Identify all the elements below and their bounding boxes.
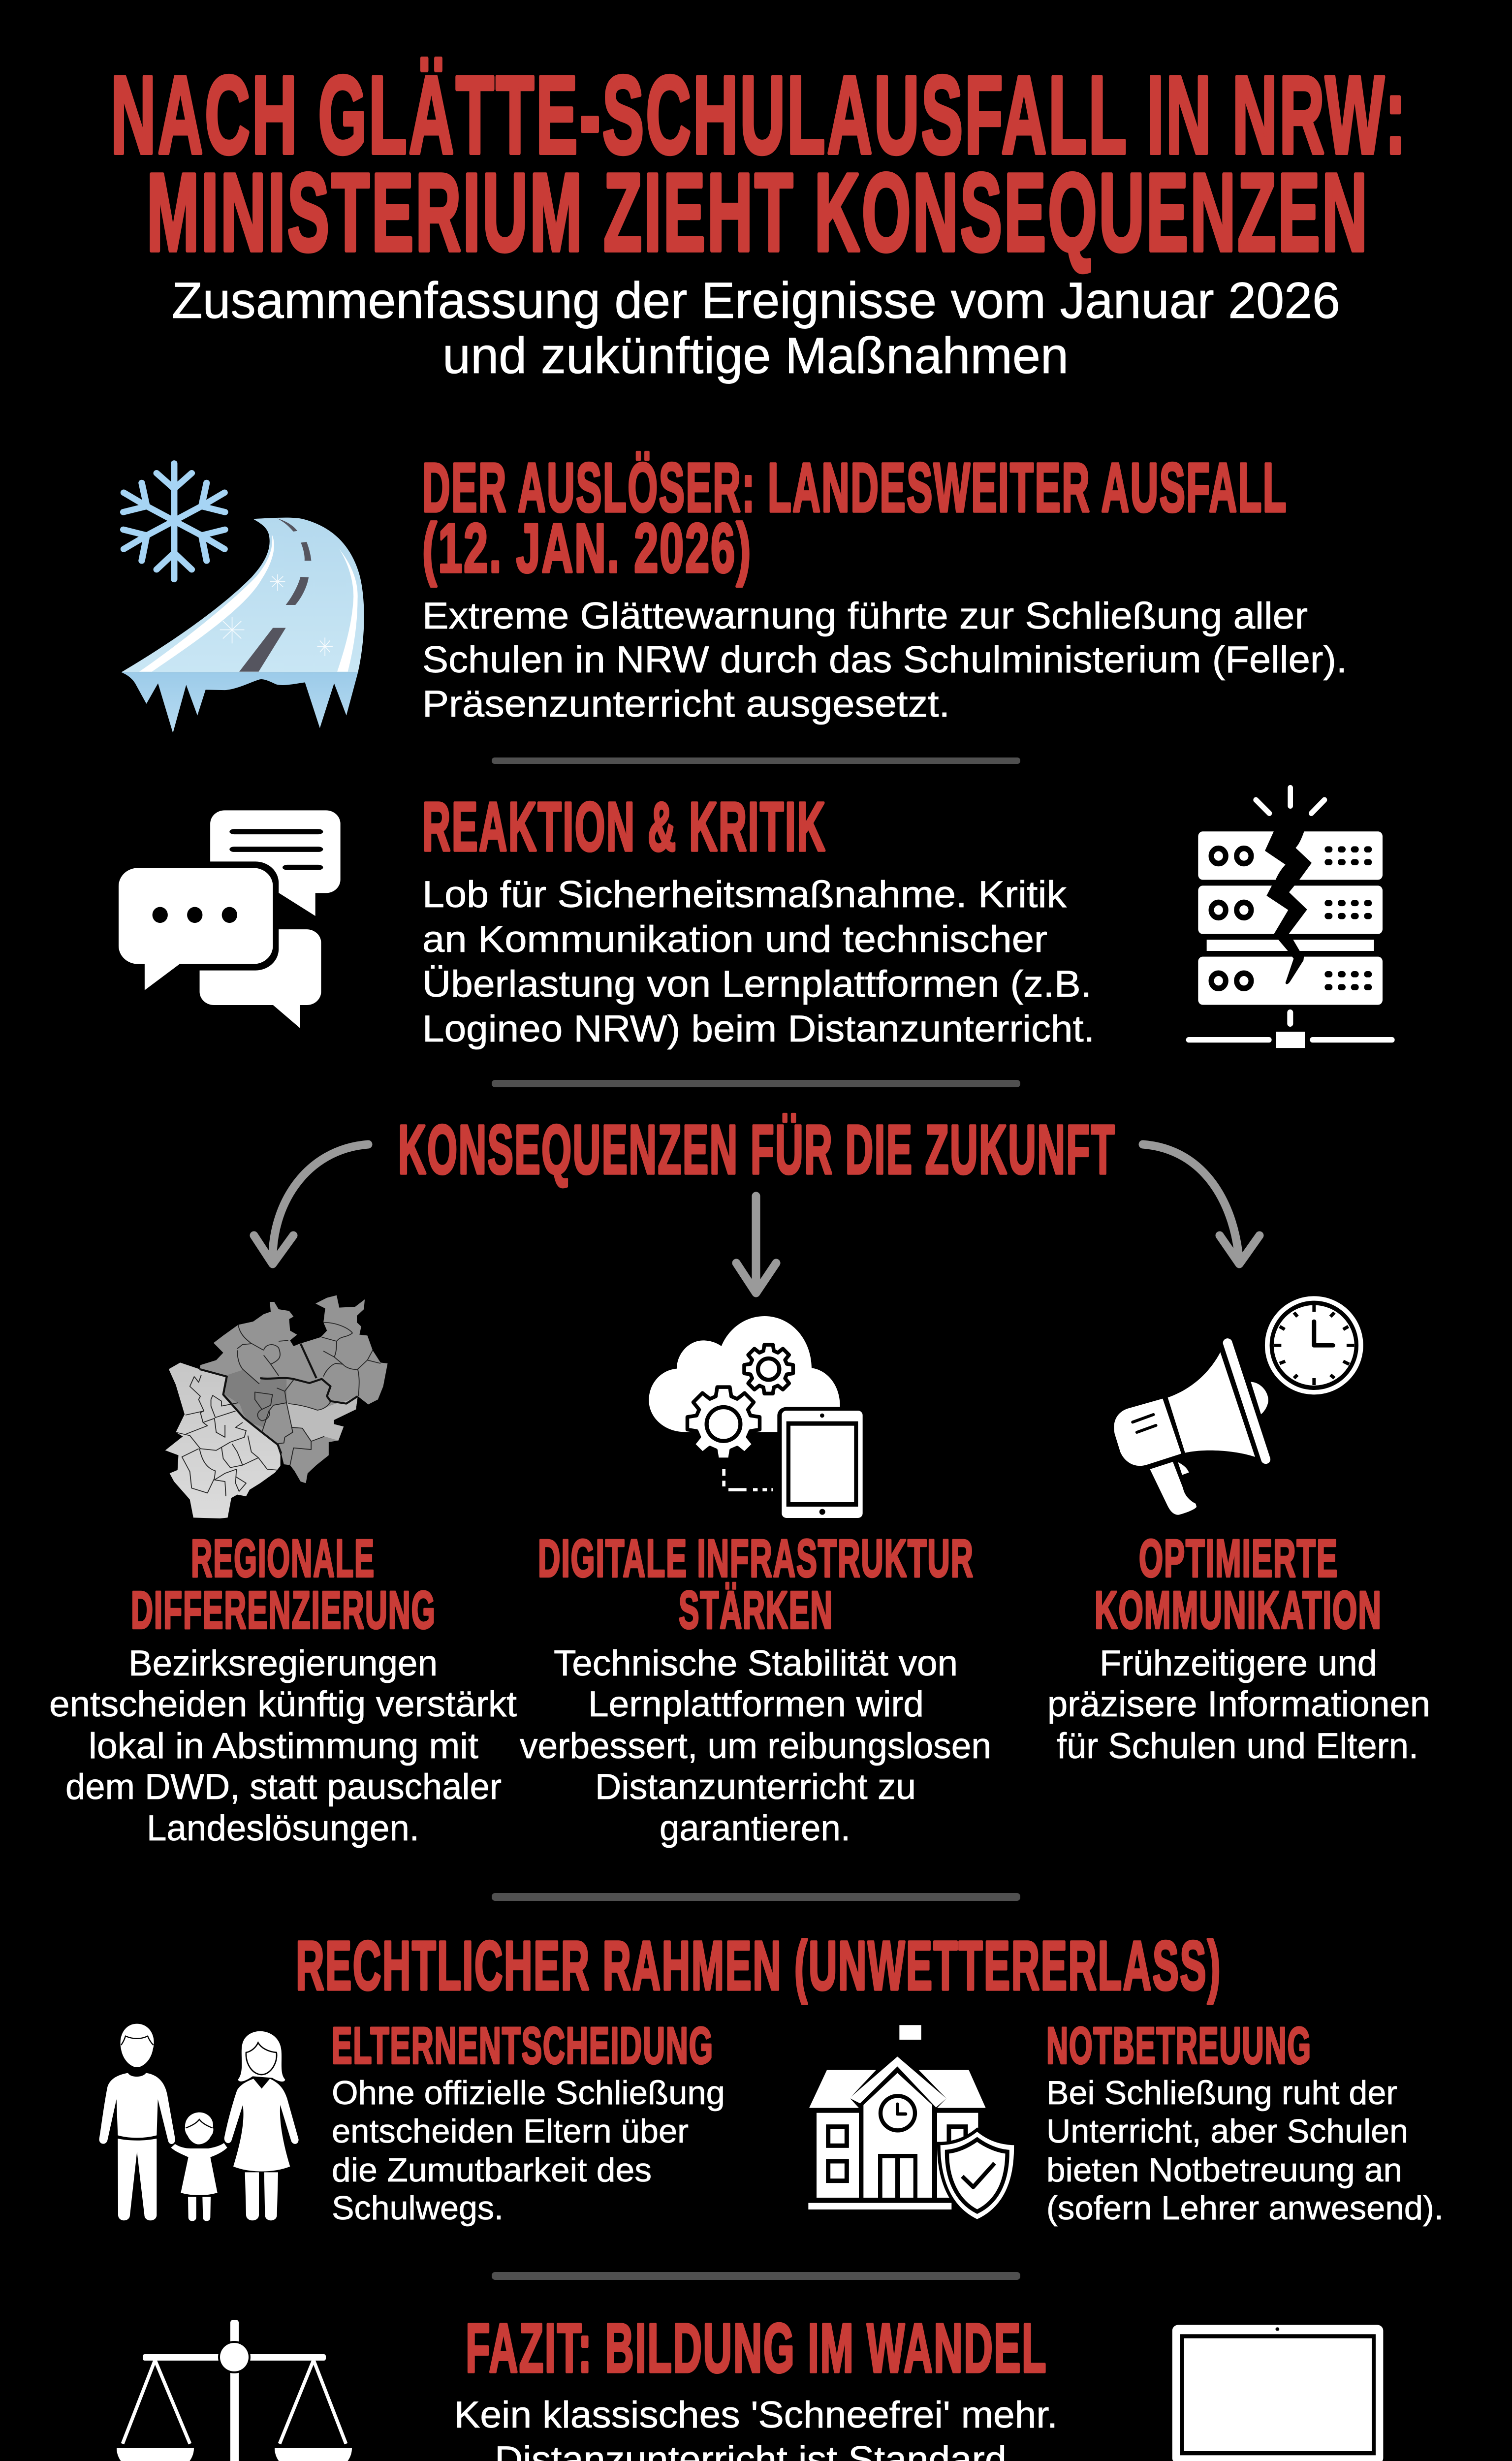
icon: megaphone and clock bbox=[1114, 1296, 1363, 1515]
panel: regionale Differenzierung bbox=[49, 1295, 517, 1848]
text: Fazit bbox=[425, 2394, 1087, 2461]
panel: Notbetreuung bbox=[808, 2017, 1444, 2227]
icon: scales bbox=[117, 2320, 352, 2461]
heading: regionale Differenzierung: DIFFERENZIERUNG bbox=[131, 1580, 436, 1640]
text: optimierte Kommunikation: präzisere Informationen bbox=[1047, 1684, 1430, 1724]
text: Notbetreuung: (sofern Lehrer anwesend). bbox=[1046, 2189, 1444, 2227]
text: Notbetreuung: Bei Schließung ruht der bbox=[1046, 2074, 1397, 2112]
text: Reaktion und Kritik: Lob für Sicherheitsmaßnahme. Kritik bbox=[422, 874, 1067, 915]
icon: family bbox=[99, 2024, 299, 2221]
text: Notbetreuung: Unterricht, aber Schulen bbox=[1046, 2113, 1408, 2150]
text: Reaktion und Kritik: Überlastung von Lernplattformen (z.B. bbox=[422, 963, 1092, 1005]
heading: regionale Differenzierung bbox=[131, 1528, 436, 1640]
text: regionale Differenzierung: entscheiden künftig verstärkt bbox=[49, 1684, 517, 1724]
title bbox=[111, 53, 1408, 274]
icon: snowflake and icy road bbox=[121, 464, 364, 733]
arrow: right bbox=[1143, 1144, 1260, 1264]
panel: Reaktion und Kritik bbox=[113, 788, 1392, 1050]
heading: digitale Infrastruktur bbox=[538, 1528, 974, 1640]
text: regionale Differenzierung: lokal in Abstimmung mit bbox=[89, 1726, 478, 1766]
heading: digitale Infrastruktur: STÄRKEN bbox=[679, 1580, 833, 1640]
text: Reaktion und Kritik: Logineo NRW) beim Distanzunterricht. bbox=[422, 1008, 1095, 1050]
text: digitale Infrastruktur: garantieren. bbox=[660, 1808, 850, 1848]
text: der Auslöser bbox=[422, 595, 1347, 725]
heading: der Auslöser bbox=[422, 448, 1288, 587]
text: digitale Infrastruktur: Lernplattformen wird bbox=[588, 1684, 924, 1724]
text: der Auslöser: Extreme Glättewarnung führte zur Schließung aller bbox=[422, 595, 1308, 637]
panel: Fazit bbox=[117, 2309, 1408, 2461]
subtitle bbox=[172, 272, 1340, 384]
text: Notbetreuung bbox=[1046, 2074, 1444, 2227]
icon: school with shield bbox=[808, 2025, 1015, 2221]
icon: laptop bbox=[1148, 2325, 1408, 2461]
text: Fazit: Kein klassisches 'Schneefrei' mehr. bbox=[454, 2394, 1058, 2436]
heading: Elternentscheidung: ELTERNENTSCHEIDUNG bbox=[332, 2017, 714, 2075]
heading: optimierte Kommunikation bbox=[1095, 1528, 1382, 1640]
text: Elternentscheidung: Ohne offizielle Schließung bbox=[332, 2074, 725, 2112]
text: optimierte Kommunikation: für Schulen und Eltern. bbox=[1057, 1726, 1418, 1766]
icon: broken server bbox=[1189, 788, 1392, 1048]
arrow: center bbox=[736, 1196, 776, 1293]
text: Elternentscheidung: die Zumutbarkeit des bbox=[332, 2151, 652, 2189]
icon: NRW map bbox=[165, 1295, 387, 1518]
panel: der Auslöser bbox=[121, 448, 1347, 733]
heading: regionale Differenzierung: REGIONALE bbox=[191, 1528, 375, 1588]
heading: der Auslöser: (12. JAN. 2026) bbox=[422, 509, 752, 587]
text: Elternentscheidung bbox=[332, 2074, 725, 2227]
icon: cloud, gears and tablet bbox=[649, 1316, 863, 1518]
text: digitale Infrastruktur: verbessert, um reibungslosen bbox=[520, 1726, 991, 1766]
icon: speech bubbles bbox=[113, 810, 341, 1028]
heading: Reaktion und Kritik: REAKTION & KRITIK bbox=[422, 788, 826, 865]
text: digitale Infrastruktur: Distanzunterricht zu bbox=[595, 1767, 916, 1807]
subtitle: Zusammenfassung der Ereignisse vom Januar 2026 bbox=[172, 272, 1340, 329]
heading: digitale Infrastruktur: DIGITALE INFRASTRUKTUR bbox=[538, 1528, 974, 1588]
heading: optimierte Kommunikation: OPTIMIERTE bbox=[1139, 1528, 1338, 1588]
panel: optimierte Kommunikation bbox=[1047, 1296, 1430, 1766]
text: der Auslöser: Präsenzunterricht ausgesetzt. bbox=[422, 683, 950, 725]
text: regionale Differenzierung bbox=[49, 1643, 517, 1848]
text: regionale Differenzierung: Bezirksregierungen bbox=[128, 1643, 438, 1683]
text: regionale Differenzierung: dem DWD, statt pauschaler bbox=[65, 1767, 502, 1807]
panel: Elternentscheidung bbox=[99, 2017, 725, 2227]
text: Elternentscheidung: Schulwegs. bbox=[332, 2189, 504, 2227]
text: digitale Infrastruktur bbox=[520, 1643, 991, 1848]
text: Notbetreuung: bieten Notbetreuung an bbox=[1046, 2151, 1402, 2189]
panel: digitale Infrastruktur bbox=[520, 1316, 991, 1848]
heading: Fazit: FAZIT: BILDUNG IM WANDEL bbox=[466, 2309, 1047, 2387]
text: Reaktion und Kritik bbox=[422, 874, 1095, 1050]
text: regionale Differenzierung: Landeslösungen. bbox=[147, 1808, 419, 1848]
heading: Notbetreuung: NOTBETREUUNG bbox=[1046, 2017, 1312, 2075]
text: optimierte Kommunikation: Frühzeitigere und bbox=[1100, 1643, 1377, 1683]
text: optimierte Kommunikation bbox=[1047, 1643, 1430, 1766]
text: digitale Infrastruktur: Technische Stabilität von bbox=[554, 1643, 958, 1683]
arrow: left bbox=[254, 1144, 368, 1264]
text: Reaktion und Kritik: an Kommunikation und technischer bbox=[422, 918, 1047, 960]
text: der Auslöser: Schulen in NRW durch das Schulministerium (Feller). bbox=[422, 639, 1347, 681]
subtitle: und zukünftige Maßnahmen bbox=[442, 327, 1069, 384]
text: Elternentscheidung: entscheiden Eltern über bbox=[332, 2113, 689, 2150]
